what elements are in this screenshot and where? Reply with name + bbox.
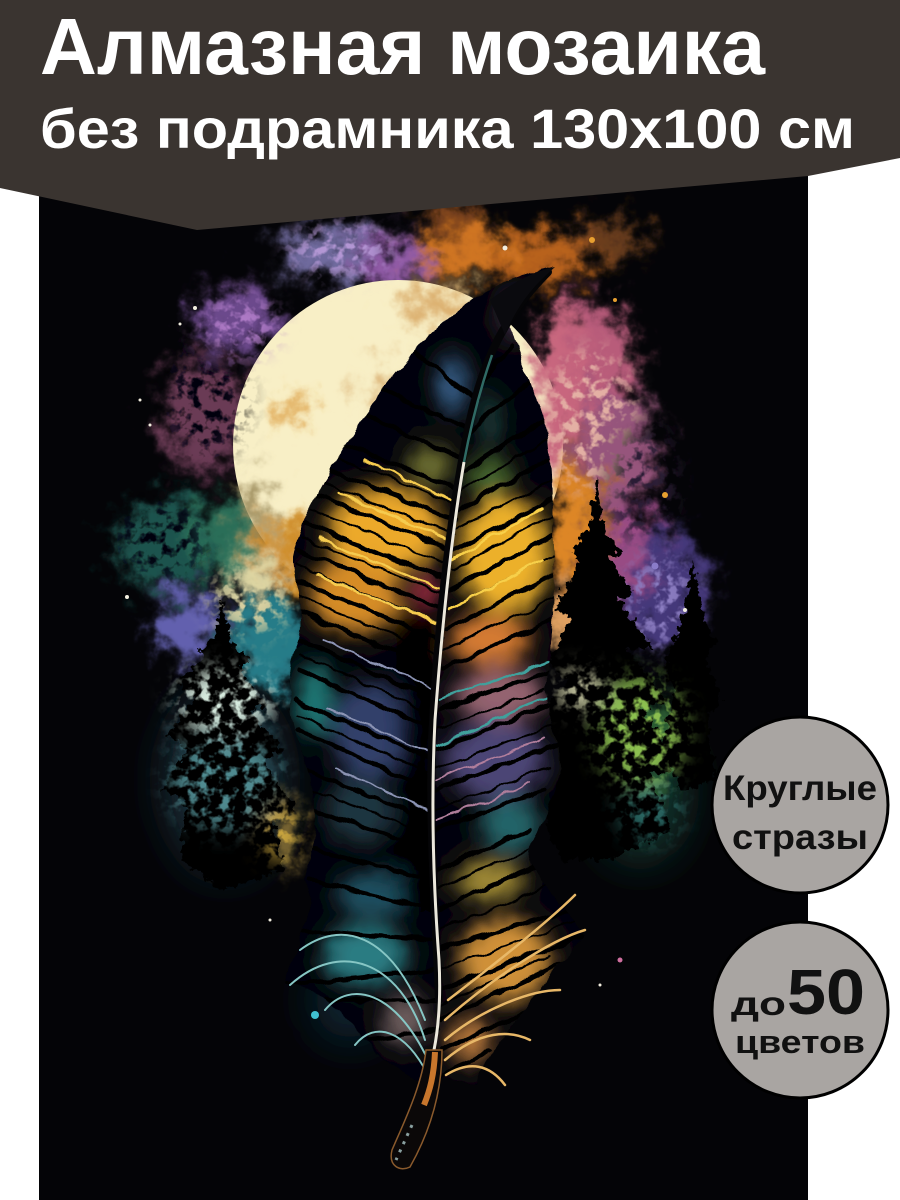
colour nebula (115, 193, 704, 870)
moon (229, 280, 601, 650)
panel: artwork (39, 176, 808, 1200)
nebula light mottling (116, 226, 696, 646)
feather barbs: highlights (317, 460, 550, 820)
feather shaft (431, 272, 548, 1000)
badge: up to 50 colours: до (731, 985, 786, 1022)
stars (125, 237, 687, 1019)
badge: up to 50 colours: 50 (787, 956, 865, 1028)
badge: round rhinestones: Круглые (723, 769, 877, 808)
feather barbs: thin black (296, 440, 578, 1005)
tree: left (160, 600, 296, 890)
title: Алмазная мозаика (40, 2, 765, 91)
badge: round rhinestones (712, 717, 888, 893)
feather lower strands (290, 895, 585, 1085)
feather vane (286, 266, 573, 1084)
feather colour patches (297, 291, 551, 1062)
feather tip (490, 267, 555, 335)
badge: round rhinestones: стразы (732, 818, 868, 857)
trees (160, 478, 722, 890)
badge: up to 50 colours (712, 922, 888, 1098)
feather quill (391, 1050, 442, 1169)
banner (0, 0, 900, 230)
dim nebula glow (170, 690, 685, 1040)
tree: far right (664, 560, 722, 790)
feather (286, 266, 586, 1086)
badge: up to 50 colours: цветов (735, 1024, 865, 1060)
moon mottling (229, 287, 601, 650)
banner shape (0, 0, 900, 230)
tree foliage highlights (170, 668, 685, 860)
feather barbs: black (286, 345, 585, 1075)
tree: right tall (520, 478, 684, 860)
subtitle: без подрамника 130х100 см (40, 97, 855, 160)
